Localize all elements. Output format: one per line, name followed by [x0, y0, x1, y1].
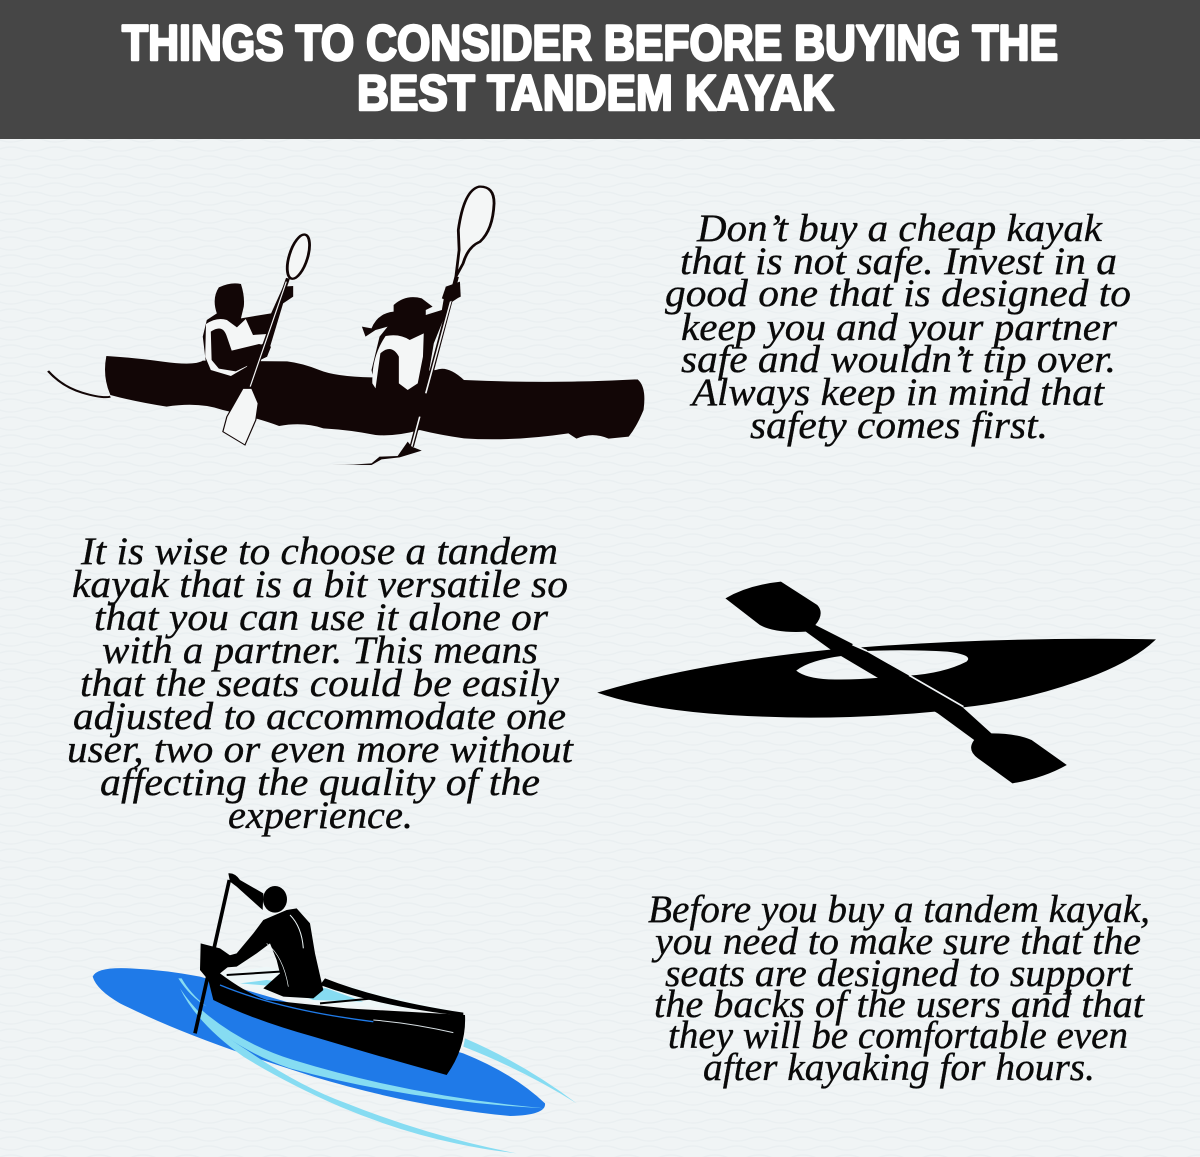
water streaks	[178, 978, 577, 1153]
text block: versatility: experience.	[228, 794, 413, 837]
text block: versatility: that the seats could be easily	[80, 662, 560, 705]
text block: safety: that is not safe. Invest in a	[680, 240, 1117, 283]
text block: safety: keep you and your partner	[681, 306, 1118, 349]
text block: seats: you need to make sure that the	[651, 920, 1141, 963]
header banner	[0, 0, 1200, 139]
text block: safety	[665, 207, 1131, 447]
text block: safety: safety comes first.	[750, 404, 1048, 447]
text block: versatility	[67, 530, 574, 837]
text block: versatility: It is wise to choose a tandem	[80, 530, 558, 573]
title: BEST TANDEM KAYAK	[357, 65, 834, 121]
kayak hull	[597, 639, 1156, 718]
text block: seats: the backs of the users and that	[654, 983, 1145, 1026]
paddler	[207, 873, 323, 998]
text block: seats	[648, 888, 1150, 1089]
canoe interior	[220, 967, 463, 1013]
text block: safety: Always keep in mind that	[689, 371, 1105, 414]
text block: safety: Don’t buy a cheap kayak	[696, 207, 1103, 250]
paddle: front	[223, 233, 314, 445]
illustration: two paddlers in a tandem kayak	[48, 187, 644, 465]
paddle: rear	[331, 187, 494, 465]
canoe hull	[200, 943, 465, 1075]
text block: seats: seats are designed to support	[665, 952, 1133, 995]
text block: safety: safe and wouldn’t tip over.	[681, 338, 1116, 381]
paddle	[725, 582, 1067, 783]
text block: versatility: that you can use it alone or	[94, 596, 549, 639]
illustration: kayak and crossed paddle	[597, 582, 1156, 783]
illustration: paddler in canoe on blue water	[93, 873, 577, 1153]
paddler: front figure	[203, 283, 293, 377]
text block: versatility: affecting the quality of the	[100, 761, 540, 804]
text block: safety: good one that is designed to	[665, 272, 1131, 315]
paddle shaft	[195, 880, 229, 1033]
text block: seats: after kayaking for hours.	[703, 1046, 1095, 1089]
text block: seats: Before you buy a tandem kayak,	[648, 888, 1150, 931]
text block: versatility: kayak that is a bit versatile so	[72, 563, 568, 606]
paddler: rear figure	[362, 285, 460, 390]
text block: versatility: adjusted to accommodate one	[73, 695, 566, 738]
title: THINGS TO CONSIDER BEFORE BUYING THE	[122, 15, 1058, 71]
text block: seats: they will be comfortable even	[668, 1014, 1128, 1057]
title	[122, 15, 1058, 121]
text block: versatility: user, two or even more without	[67, 728, 574, 771]
water ellipse	[93, 968, 545, 1116]
text block: versatility: with a partner. This means	[102, 629, 538, 672]
